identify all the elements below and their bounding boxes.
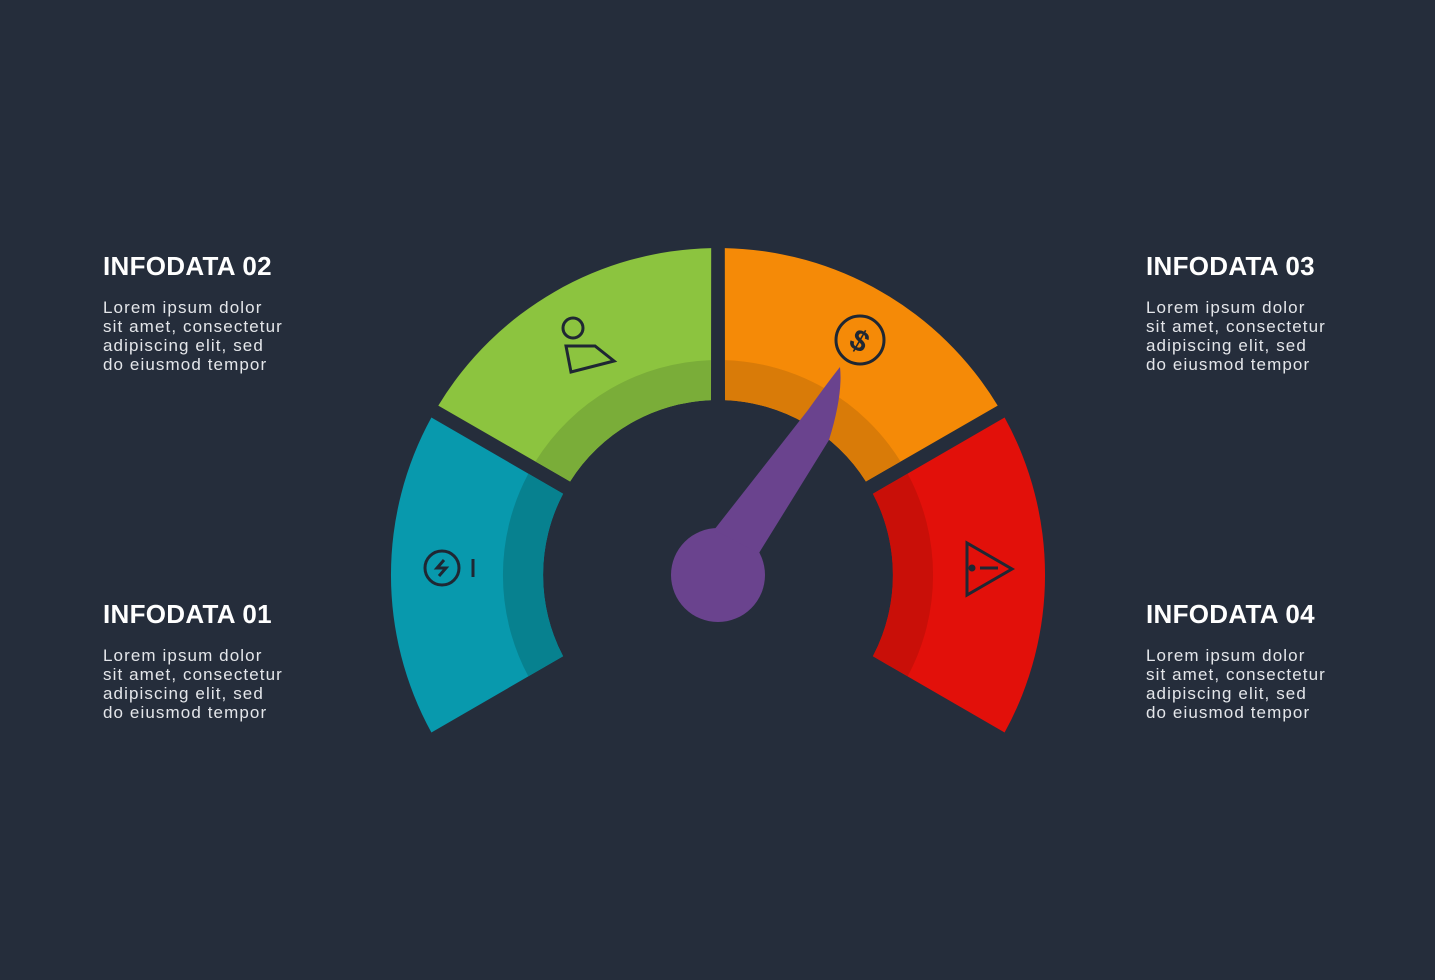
icon: dollar: [836, 316, 884, 364]
text block: infodata 02: adipiscing elit, sed: [103, 336, 264, 355]
text block: infodata 02: sit amet, consectetur: [103, 317, 283, 336]
segment: cyan: [391, 418, 563, 732]
segment: green: [438, 248, 711, 482]
text block: infodata 03: sit amet, consectetur: [1146, 317, 1326, 336]
text block: infodata 04: Lorem ipsum dolor: [1146, 646, 1305, 665]
text block: infodata 02: INFODATA 02: [103, 251, 272, 281]
text block: infodata 03: [1146, 251, 1326, 374]
text block: infodata 03: INFODATA 03: [1146, 251, 1315, 281]
text block: infodata 02: [103, 251, 283, 374]
text block: infodata 01: sit amet, consectetur: [103, 665, 283, 684]
text block: infodata 04: INFODATA 04: [1146, 599, 1315, 629]
text block: infodata 01: [103, 599, 283, 722]
icon: person: [563, 318, 614, 372]
text block: infodata 02: Lorem ipsum dolor: [103, 298, 262, 317]
text block: infodata 01: adipiscing elit, sed: [103, 684, 264, 703]
text block: infodata 03: adipiscing elit, sed: [1146, 336, 1307, 355]
segment: red: [873, 418, 1045, 732]
text block: infodata 04: [1146, 599, 1326, 722]
text block: infodata 02: do eiusmod tempor: [103, 355, 267, 374]
text block: infodata 03: do eiusmod tempor: [1146, 355, 1310, 374]
text block: infodata 01: INFODATA 01: [103, 599, 272, 629]
icon: dollar: $: [844, 323, 875, 360]
text block: infodata 01: Lorem ipsum dolor: [103, 646, 262, 665]
text block: infodata 03: Lorem ipsum dolor: [1146, 298, 1305, 317]
icon: warning: [967, 543, 1012, 595]
text block: infodata 01: do eiusmod tempor: [103, 703, 267, 722]
text block: infodata 04: do eiusmod tempor: [1146, 703, 1310, 722]
segment: orange: [725, 248, 998, 482]
needle: [671, 367, 841, 622]
text block: infodata 04: sit amet, consectetur: [1146, 665, 1326, 684]
icon: bulb: [425, 551, 473, 585]
text block: infodata 04: adipiscing elit, sed: [1146, 684, 1307, 703]
